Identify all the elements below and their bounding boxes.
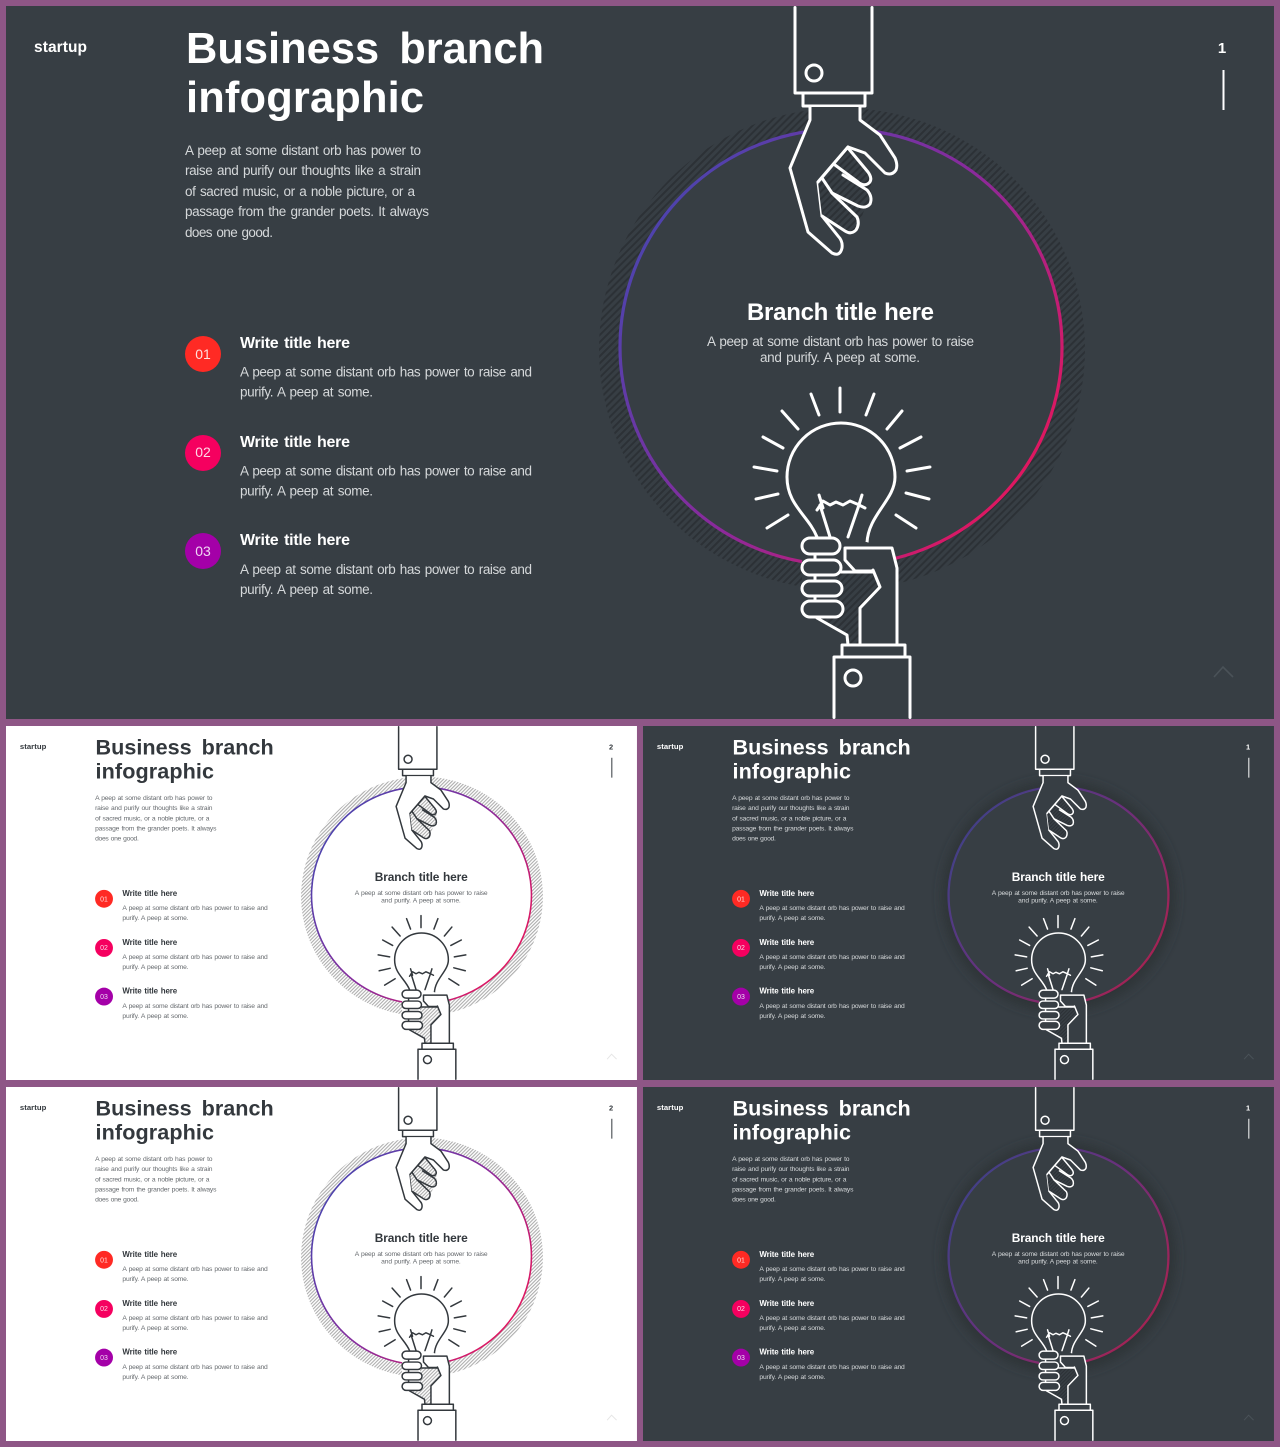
list item 03: A peep at some distant orb has power to raise and — [122, 1003, 268, 1010]
branch heading: Branch title here — [1012, 1231, 1105, 1245]
list item 01: 01 — [195, 346, 211, 362]
intro text block — [95, 1156, 217, 1204]
list item 01: 01 — [100, 896, 108, 903]
intro text block: does one good. — [732, 1197, 776, 1204]
list item 02: purify. A peep at some. — [122, 1325, 189, 1332]
title: infographic — [733, 1120, 851, 1145]
list item 02 — [732, 1299, 905, 1332]
list item 01 — [95, 889, 268, 922]
list item 02: Write title here — [122, 938, 178, 947]
title: infographic — [96, 1120, 214, 1145]
gradient circle — [312, 1148, 531, 1365]
list item 02: A peep at some distant orb has power to raise and — [122, 954, 268, 961]
icon: chevron — [1244, 1415, 1254, 1420]
list item 01: A peep at some distant orb has power to raise and — [759, 1266, 905, 1273]
icon: upper hand — [396, 1088, 449, 1210]
title: Business branch — [186, 25, 544, 73]
icon: upper hand — [1033, 727, 1086, 849]
list item 02: purify. A peep at some. — [759, 1325, 826, 1332]
intro text block: does one good. — [95, 1197, 139, 1204]
list item 02: A peep at some distant orb has power to raise and — [759, 1315, 905, 1322]
list item 02: 02 — [100, 945, 108, 952]
branch text — [355, 890, 488, 905]
list item 02: Write title here — [759, 938, 815, 947]
list item 01: Write title here — [122, 889, 178, 898]
list item 01 — [185, 335, 532, 400]
list item 03 — [732, 987, 905, 1020]
list item 03: A peep at some distant orb has power to raise and — [759, 1364, 905, 1371]
intro text block: does one good. — [185, 225, 273, 240]
branch text — [992, 1251, 1125, 1266]
icon: lower hand holding bulb — [402, 1351, 456, 1440]
page number — [1218, 40, 1226, 110]
icon: light bulb — [378, 1277, 466, 1354]
intro text block: raise and purify our thoughts like a strain — [732, 1166, 850, 1173]
gradient circle — [620, 129, 1062, 565]
list item 03: 03 — [737, 994, 745, 1001]
soft halo behind circle — [942, 1141, 1176, 1373]
intro text block — [732, 1156, 854, 1204]
list item 02 — [185, 434, 532, 498]
page number — [609, 1103, 613, 1139]
intro text block: A peep at some distant orb has power to — [732, 795, 850, 802]
list item 03: 03 — [195, 543, 211, 559]
page number: 1 — [1246, 1103, 1250, 1112]
gradient circle — [949, 787, 1168, 1004]
list item 03: Write title here — [122, 987, 178, 996]
list item 02: Write title here — [122, 1299, 178, 1308]
branch text: and purify. A peep at some. — [381, 898, 461, 905]
list item 01: purify. A peep at some. — [759, 915, 826, 922]
title: Business branch — [96, 734, 274, 759]
intro text block: passage from the grander poets. It always — [95, 825, 217, 832]
icon: lower hand holding bulb — [802, 538, 910, 718]
panel: large dark slide — [6, 6, 1274, 719]
intro text block — [732, 795, 854, 843]
brand label: startup — [34, 39, 87, 56]
brand label: startup — [20, 742, 47, 751]
hatched ring behind circle — [301, 1138, 543, 1377]
intro text block: raise and purify our thoughts like a strain — [732, 805, 850, 812]
list item 03 — [732, 1348, 905, 1381]
intro text block — [95, 795, 217, 843]
brand label: startup — [657, 742, 684, 751]
branch text: A peep at some distant orb has power to raise — [355, 1251, 488, 1258]
list item 03: A peep at some distant orb has power to raise and — [122, 1364, 268, 1371]
list item 01: Write title here — [759, 889, 815, 898]
intro text block: of sacred music, or a noble picture, or a — [732, 1176, 847, 1183]
intro text block: does one good. — [732, 836, 776, 843]
branch text: and purify. A peep at some. — [760, 350, 920, 365]
branch text: A peep at some distant orb has power to raise — [355, 890, 488, 897]
icon: chevron — [1244, 1054, 1254, 1059]
panel: small light slide bottom — [6, 1087, 637, 1441]
icon: light bulb — [1015, 916, 1103, 993]
list item 02 — [732, 938, 905, 971]
list item 01: Write title here — [759, 1250, 815, 1259]
page number — [1246, 1103, 1250, 1139]
list item 02: A peep at some distant orb has power to raise and — [759, 954, 905, 961]
list item 03: 03 — [100, 1355, 108, 1362]
list item 01: A peep at some distant orb has power to raise and — [759, 905, 905, 912]
list item 03: 03 — [737, 1355, 745, 1362]
intro text block: does one good. — [95, 836, 139, 843]
panel: small dark slide top — [643, 726, 1274, 1080]
page number: 1 — [1246, 742, 1250, 751]
intro text block: A peep at some distant orb has power to — [732, 1156, 850, 1163]
intro text block: raise and purify our thoughts like a strain — [185, 163, 421, 178]
icon: chevron — [607, 1415, 617, 1420]
list item 03 — [95, 987, 268, 1020]
branch text: and purify. A peep at some. — [1018, 898, 1098, 905]
branch text — [355, 1251, 488, 1266]
list item 01: 01 — [100, 1257, 108, 1264]
list item 01: purify. A peep at some. — [122, 915, 189, 922]
title: Business branch — [96, 1095, 274, 1120]
list item 01: A peep at some distant orb has power to raise and — [122, 1266, 268, 1273]
list item 01: A peep at some distant orb has power to raise and — [240, 364, 532, 380]
list item 01: A peep at some distant orb has power to raise and — [122, 905, 268, 912]
title: Business branch — [733, 734, 911, 759]
page number: 2 — [609, 1103, 613, 1112]
branch heading: Branch title here — [375, 1231, 468, 1245]
intro text block: of sacred music, or a noble picture, or a — [95, 815, 210, 822]
panel: small light slide top — [6, 726, 637, 1080]
title: Business branch — [733, 1095, 911, 1120]
page number: 1 — [1218, 40, 1226, 57]
list item 03: 03 — [100, 994, 108, 1001]
intro text block: raise and purify our thoughts like a strain — [95, 805, 213, 812]
title — [96, 1095, 274, 1145]
list item 01: Write title here — [122, 1250, 178, 1259]
icon: lower hand holding bulb — [1039, 1351, 1093, 1440]
branch heading: Branch title here — [747, 299, 934, 326]
list item 03: Write title here — [759, 1348, 815, 1357]
branch text: A peep at some distant orb has power to raise — [992, 1251, 1125, 1258]
list item 02: A peep at some distant orb has power to raise and — [122, 1315, 268, 1322]
intro text block: A peep at some distant orb has power to — [185, 143, 421, 158]
title: infographic — [733, 759, 851, 784]
icon: chevron — [1214, 667, 1233, 677]
list item 03 — [185, 532, 532, 597]
intro text block: passage from the grander poets. It always — [732, 1186, 854, 1193]
branch heading: Branch title here — [1012, 870, 1105, 884]
list item 02: Write title here — [240, 434, 350, 451]
gradient circle — [949, 1148, 1168, 1365]
list item 03: Write title here — [122, 1348, 178, 1357]
list item 03: purify. A peep at some. — [240, 582, 373, 597]
list item 02: 02 — [737, 1306, 745, 1313]
list item 02: A peep at some distant orb has power to raise and — [240, 464, 532, 478]
intro text block: A peep at some distant orb has power to — [95, 1156, 213, 1163]
panel: small dark slide bottom — [643, 1087, 1274, 1441]
list item 01: purify. A peep at some. — [759, 1276, 826, 1283]
list item 02: 02 — [100, 1306, 108, 1313]
list item 02 — [95, 938, 268, 971]
branch text — [707, 334, 974, 365]
list item 03 — [95, 1348, 268, 1381]
list item 02: purify. A peep at some. — [240, 484, 373, 498]
hatched ring behind circle — [301, 777, 543, 1016]
list item 02: 02 — [195, 444, 211, 460]
gradient circle — [312, 787, 531, 1004]
branch text: A peep at some distant orb has power to raise — [707, 334, 974, 349]
list item 03: Write title here — [759, 987, 815, 996]
list item 01 — [732, 889, 905, 922]
list item 02 — [95, 1299, 268, 1332]
title — [186, 25, 544, 122]
intro text block: of sacred music, or a noble picture, or a — [732, 815, 847, 822]
icon: lower hand holding bulb — [402, 990, 456, 1079]
list item 01 — [95, 1250, 268, 1283]
list item 01: purify. A peep at some. — [240, 384, 373, 400]
icon: light bulb — [754, 388, 930, 543]
list item 01: 01 — [737, 1257, 745, 1264]
intro text block — [185, 143, 429, 240]
branch text — [992, 890, 1125, 905]
intro text block: passage from the grander poets. It always — [95, 1186, 217, 1193]
list item 03: purify. A peep at some. — [759, 1374, 826, 1381]
soft halo behind circle — [942, 780, 1176, 1012]
list item 03: purify. A peep at some. — [759, 1013, 826, 1020]
list item 02: Write title here — [759, 1299, 815, 1308]
icon: upper hand — [1033, 1088, 1086, 1210]
intro text block: of sacred music, or a noble picture, or a — [185, 184, 415, 199]
branch text: A peep at some distant orb has power to raise — [992, 890, 1125, 897]
list item 02: 02 — [737, 945, 745, 952]
list item 02: purify. A peep at some. — [759, 964, 826, 971]
hatched ring behind circle — [599, 108, 1085, 590]
title: infographic — [96, 759, 214, 784]
icon: upper hand — [790, 8, 897, 254]
list item 01: 01 — [737, 896, 745, 903]
icon: light bulb — [378, 916, 466, 993]
branch heading: Branch title here — [375, 870, 468, 884]
list item 03: A peep at some distant orb has power to raise and — [759, 1003, 905, 1010]
page number — [609, 742, 613, 778]
intro text block: raise and purify our thoughts like a strain — [95, 1166, 213, 1173]
icon: upper hand — [396, 727, 449, 849]
title — [733, 734, 911, 784]
list item 01: purify. A peep at some. — [122, 1276, 189, 1283]
branch text: and purify. A peep at some. — [381, 1259, 461, 1266]
list item 03: A peep at some distant orb has power to raise and — [240, 562, 532, 577]
title — [96, 734, 274, 784]
list item 03: Write title here — [240, 532, 350, 549]
brand label: startup — [657, 1103, 684, 1112]
list item 01: Write title here — [240, 335, 350, 352]
list item 01 — [732, 1250, 905, 1283]
intro text block: passage from the grander poets. It always — [185, 204, 429, 219]
title — [733, 1095, 911, 1145]
brand label: startup — [20, 1103, 47, 1112]
branch text: and purify. A peep at some. — [1018, 1259, 1098, 1266]
icon: lower hand holding bulb — [1039, 990, 1093, 1079]
title: infographic — [186, 74, 424, 122]
list item 02: purify. A peep at some. — [122, 964, 189, 971]
page number: 2 — [609, 742, 613, 751]
intro text block: of sacred music, or a noble picture, or a — [95, 1176, 210, 1183]
page number — [1246, 742, 1250, 778]
intro text block: A peep at some distant orb has power to — [95, 795, 213, 802]
icon: chevron — [607, 1054, 617, 1059]
list item 03: purify. A peep at some. — [122, 1374, 189, 1381]
list item 03: purify. A peep at some. — [122, 1013, 189, 1020]
intro text block: passage from the grander poets. It always — [732, 825, 854, 832]
icon: light bulb — [1015, 1277, 1103, 1354]
